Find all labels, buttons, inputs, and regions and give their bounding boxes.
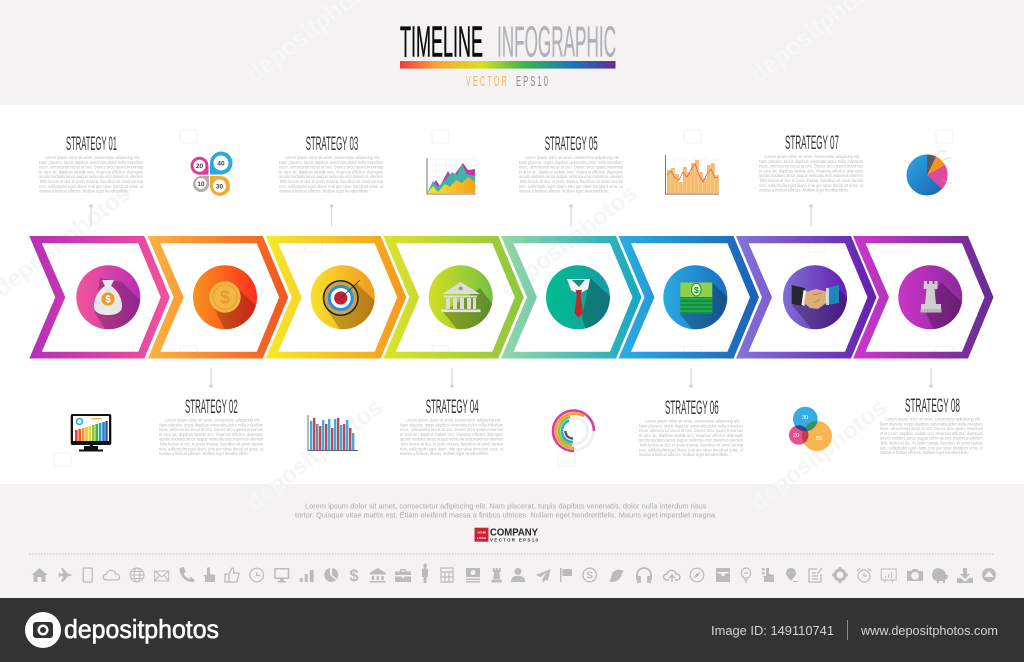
- icon: headphones: [637, 568, 651, 582]
- icon: money stack: $: [694, 285, 699, 295]
- body text: et arcu ac, dapibus sodale orci. Vivamus efficitur, diamquis: [519, 169, 623, 174]
- body text: risus, ultriciesnisi lacus at orci. Donec arcu quam,maximus: [639, 428, 744, 433]
- body text: Nam placera, turpis dapibus venenatis,dolor nulla interdum: [759, 159, 863, 164]
- body text: Lorem ipsum dolor sit amet, consectetur adipiscing elit.: [525, 155, 620, 160]
- body text: massa a finibus ultrices. Nullam eget hendreritfelis.: [639, 452, 729, 457]
- icon: mail: [155, 571, 169, 581]
- body text: Nam placera, turpis dapibus venenatis,dolor nulla interdum: [39, 160, 143, 165]
- icon: bank: [370, 568, 386, 582]
- body text: Lorem ipsum dolor sit amet, consectetur adipiscing elit.: [45, 155, 140, 160]
- body text: Lorem ipsum dolor sit amet, consectetur adipiscing elit.: [645, 418, 740, 424]
- connector: strategy 03: [330, 205, 333, 226]
- strategy 04 block: [400, 397, 504, 456]
- strategy 07 block: STRATEGY 07: [785, 133, 839, 154]
- body text: [159, 418, 264, 456]
- icon: piggy bank: [932, 568, 948, 583]
- chevron timeline: [29, 236, 994, 358]
- body text: risus, ultriciesnisi lacus at orci. Donec arcu quam,maximus: [519, 165, 623, 170]
- body text: felis lectus at dui. In justo massa, faucibus sit amet lacinia: [280, 179, 384, 184]
- body text: [39, 155, 144, 194]
- chart: quad percent petals: 10: [197, 181, 205, 188]
- chevron 6: [618, 236, 759, 358]
- body text: et arcu ac, dapibus sodale orci. Vivamus efficitur, diamquis: [759, 168, 864, 173]
- depositphotos logo mark: [25, 612, 61, 648]
- chart: pie: [904, 151, 952, 196]
- body text: risus, ultriciesnisi lacus at orci. Donec arcu quam,maximus: [759, 164, 864, 169]
- icon: camera: [907, 569, 923, 581]
- body text: iaculis sodales,lacus augue vehicula erat,maximus elemen: [519, 174, 623, 179]
- watermark: [0, 0, 953, 517]
- body text: risus, ultriciesnisi lacus at orci. Donec arcu quam,maximus: [159, 427, 264, 432]
- chart: monitor: [71, 414, 111, 452]
- icon: home: [32, 568, 48, 582]
- strategy 08 block: [880, 396, 983, 455]
- body text: [880, 416, 983, 455]
- icon: thumbs up: [225, 568, 239, 582]
- icon: money bag: [76, 265, 140, 330]
- icon: coin: [583, 568, 596, 582]
- icon: cloud upload: [664, 570, 680, 582]
- body text: non, sollicitudin eget diam. Inte ger vitae tincidunt urna, ut: [39, 184, 144, 189]
- body text: [639, 418, 744, 457]
- image id: Image ID: 149110741: [711, 624, 834, 638]
- body text: felis lectus at dui. In justo massa, faucibus sit amet lacinia: [760, 178, 864, 183]
- connector: strategy 02: [210, 368, 212, 387]
- icon: phone: [180, 567, 195, 582]
- company subtitle: VECTOR EPS10: [490, 538, 538, 542]
- body text: Nam placera, turpis dapibus venenatis,dolor nulla interdum: [400, 422, 503, 427]
- company logo: LOGO: [477, 536, 487, 540]
- body text: iaculis sodales,lacus augue vehicula erat,maximus elemen: [639, 438, 743, 443]
- icon: man: [422, 564, 428, 583]
- title: TIMELINE: [400, 18, 483, 66]
- body text: et arcu ac, dapibus sodale orci. Vivamus efficitur, diamquis: [400, 432, 504, 437]
- body text: iaculis sodales,lacus augue vehicula erat,maximus elemen: [759, 173, 863, 178]
- icon: banknote: [466, 568, 480, 582]
- chart: venn diagram: 50: [816, 436, 822, 442]
- chart: red and blue bars: [308, 415, 358, 450]
- body text: non, sollicitudin eget diam. Inte ger vitae tincidunt urna, ut: [279, 184, 384, 189]
- body text: felis lectus at dui. In justo massa, faucibus sit amet lacinia: [520, 179, 623, 184]
- icon: briefcase: [395, 569, 411, 582]
- body text: iaculis sodales,lacus augue vehicula erat,maximus elemen: [400, 437, 503, 442]
- icon: user: [511, 568, 525, 582]
- body text: massa a finibus ultrices. Nullam eget hendreritfelis.: [880, 450, 969, 455]
- chart: orange bars with line: [666, 155, 719, 194]
- body text: Nam placera, turpis dapibus venenatis,dolor nulla interdum: [159, 422, 263, 427]
- body text: Lorem ipsum dolor sit amet, consectetur adipiscing elit.: [406, 418, 501, 422]
- body text: risus, ultriciesnisi lacus at orci. Donec arcu quam,maximus: [39, 165, 144, 170]
- company name: COMPANY: [490, 528, 538, 538]
- chart: quad percent petals: 40: [217, 160, 225, 167]
- body text: non, sollicitudin eget diam. Inte ger vitae tincidunt urna, ut: [880, 445, 983, 450]
- icon: mobile: [83, 568, 92, 582]
- body text: et arcu ac, dapibus sodale orci. Vivamus efficitur, diamquis: [639, 433, 744, 438]
- strategy 03 block: [279, 134, 384, 194]
- chart: venn diagram: 30: [802, 415, 808, 421]
- body text: massa a finibus ultrices. Nullam eget hendreritfelis.: [279, 189, 369, 194]
- strategy 05 block: STRATEGY 05: [545, 134, 598, 155]
- icon: desktop: [274, 568, 289, 582]
- body text: iaculis sodales,lacus augue vehicula erat,maximus elemen: [159, 437, 263, 442]
- connector: strategy 04: [451, 368, 453, 387]
- chevron 1: [29, 236, 170, 358]
- chevron 8: [853, 236, 994, 358]
- chevron 2: [148, 236, 288, 358]
- subtitle: eps10: EPS10: [516, 73, 550, 90]
- body text: iaculis sodales,lacus augue vehicula erat,maximus elemen: [880, 436, 983, 441]
- body text: [279, 155, 384, 194]
- body text: iaculis sodales,lacus augue vehicula erat,maximus elemen: [279, 174, 383, 179]
- strategy 06 block: STRATEGY 06: [665, 398, 719, 419]
- icon: contact badge: [982, 568, 996, 582]
- body text: Lorem ipsum dolor sit amet, consectetur adipiscing elit.: [285, 155, 380, 160]
- chart: venn diagram: [789, 407, 832, 451]
- body text: felis lectus at dui. In justo massa, faucibus sit amet lacinia: [160, 442, 264, 446]
- icon: bird: [608, 570, 624, 582]
- icon: target: [310, 265, 375, 330]
- chart: quad percent petals: [190, 152, 232, 196]
- body text: et arcu ac, dapibus sodale orci. Vivamus efficitur, diamquis: [279, 169, 384, 174]
- chevron 7: [736, 236, 876, 358]
- body text: non, sollicitudin eget diam. Inte ger vitae tincidunt urna, ut: [519, 184, 623, 189]
- strategy 04 block: STRATEGY 04: [426, 397, 479, 418]
- icon: coin: $: [220, 288, 230, 308]
- company logo: YOUR: [477, 530, 487, 534]
- icon: gear: [832, 567, 848, 583]
- body text: Nam placera, turpis dapibus venenatis,dolor nulla interdum: [519, 160, 623, 165]
- body text: Nam placera, turpis dapibus venenatis,dolor nulla interdum: [880, 421, 983, 426]
- body text: Lorem ipsum dolor sit amet, consectetur adipiscing elit.: [165, 418, 260, 422]
- icon: clock: [250, 568, 264, 582]
- body text: massa a finibus ultrices. Nullam eget hendreritfelis.: [759, 188, 849, 193]
- footer band: [0, 484, 1024, 598]
- icon: bulb: [741, 568, 751, 582]
- body text: [519, 155, 623, 194]
- icon: bars: [300, 570, 314, 582]
- icon: handshake: [783, 265, 847, 330]
- body text: non, sollicitudin eget diam. Inte ger vitae tincidunt urna, ut: [400, 446, 504, 451]
- chart: radial rainbow: [553, 410, 594, 451]
- icon: dollar: $: [349, 566, 359, 585]
- body text: felis lectus at dui. In justo massa, faucibus sit amet lacinia: [40, 179, 144, 184]
- body text: felis lectus at dui. In justo massa, faucibus sit amet lacinia: [881, 440, 983, 446]
- icon: paper plane: [536, 569, 551, 583]
- body text: [400, 418, 504, 456]
- body text: massa a finibus ultrices. Nullam eget hendreritfelis.: [159, 451, 249, 456]
- icon: globe: [130, 568, 144, 582]
- footer text: tortor. Quisque vitae mattis est. Etiam eleifend massa a finibus ultrices. Nullam eget hendreritfelis. Mauris eget imperdiet magna.: [295, 510, 717, 520]
- body text: non, sollicitudin eget diam. Inte ger vitae tincidunt urna, ut: [639, 447, 744, 452]
- title: [400, 18, 616, 90]
- icon: flag: [560, 568, 572, 582]
- strategy 05 block: [519, 134, 623, 194]
- icon: tie: [546, 265, 610, 330]
- connector: strategy 05: [570, 205, 572, 226]
- body text: massa a finibus ultrices. Nullam eget hendreritfelis.: [39, 189, 129, 194]
- connector: strategy 01: [90, 205, 92, 226]
- body text: massa a finibus ultrices. Nullam eget hendreritfelis.: [400, 451, 489, 456]
- chart: quad percent petals: 20: [196, 163, 203, 170]
- icon: chess rook: [898, 265, 962, 330]
- chevron 3: [266, 236, 406, 358]
- body text: risus, ultriciesnisi lacus at orci. Donec arcu quam,maximus: [400, 427, 504, 432]
- watermark: depositphotos: [241, 394, 388, 517]
- body text: et arcu ac, dapibus sodale orci. Vivamus efficitur, diamquis: [880, 431, 983, 436]
- footer text: Lorem ipsum dolor sit amet, consectetur adipiscing elit. Nam placerat, turpis dapibus venenatis, dolor nulla interdum risus: [305, 502, 707, 510]
- chart: quad percent petals: 30: [216, 183, 223, 190]
- icon: money stack: [663, 265, 728, 330]
- icon: cloud: [103, 570, 120, 580]
- strategy 07 block: [759, 133, 864, 193]
- body text: Nam placera, turpis dapibus venenatis,dolor nulla interdum: [639, 423, 743, 428]
- icon: money bag: $: [105, 295, 111, 306]
- body text: non, sollicitudin eget diam. Inte ger vitae tincidunt urna, ut: [159, 446, 264, 451]
- body text: iaculis sodales,lacus augue vehicula erat,maximus elemen: [39, 174, 143, 179]
- icon: inbox: [716, 568, 730, 582]
- icon: pie: [324, 568, 338, 582]
- icon: rook: [492, 568, 502, 582]
- body text: Lorem ipsum dolor sit amet, consectetur adipiscing elit.: [886, 416, 981, 422]
- strategy 01 block: [39, 134, 144, 194]
- footer text: [295, 502, 717, 520]
- body text: Lorem ipsum dolor sit amet, consectetur adipiscing elit.: [765, 154, 860, 159]
- chevron 5: [501, 236, 642, 358]
- dotted divider: [29, 553, 994, 555]
- watermark: depositphotos: [745, 394, 892, 517]
- logo mark: [474, 528, 488, 542]
- text: INFOGRAPHIC: [497, 18, 616, 66]
- site url: www.depositphotos.com: [860, 624, 998, 638]
- divider: [847, 620, 848, 640]
- body text: Nam placera, turpis dapibus venenatis,dolor nulla interdum: [279, 160, 383, 165]
- strategy 02 block: STRATEGY 02: [185, 397, 238, 418]
- icon: download: [957, 568, 973, 583]
- strategy 02 block: [159, 397, 264, 456]
- body text: felis lectus at dui. In justo massa, faucibus sit amet lacinia: [401, 442, 503, 446]
- body text: risus, ultriciesnisi lacus at orci. Donec arcu quam,maximus: [880, 426, 983, 431]
- rainbow bar: [400, 61, 616, 69]
- strategy 03 block: STRATEGY 03: [306, 134, 358, 155]
- icon row: [32, 564, 996, 585]
- icon: touch: [203, 567, 215, 582]
- chart: venn diagram: 20: [793, 433, 799, 439]
- body text: [759, 154, 864, 193]
- chevron 4: [383, 236, 524, 358]
- strategy 06 block: [639, 398, 744, 457]
- bottom brand bar: [0, 598, 1024, 662]
- watermark: depositphotos: [495, 180, 642, 303]
- body text: risus, ultriciesnisi lacus at orci. Donec arcu quam,maximus: [279, 165, 384, 170]
- connector: strategy 06: [690, 368, 692, 387]
- body text: et arcu ac, dapibus sodale orci. Vivamus efficitur, diamquis: [39, 169, 144, 174]
- depositphotos wordmark: depositphotos: [64, 614, 219, 644]
- icon: bank: [428, 265, 493, 330]
- icon: compass: [690, 568, 704, 582]
- icon: plane: [59, 568, 73, 582]
- header band: [0, 0, 1024, 105]
- connector: strategy 08: [930, 368, 932, 387]
- company logo: [474, 528, 538, 542]
- icon: presentation: [881, 569, 896, 582]
- icon: alarm clock: [857, 568, 871, 582]
- strategy 01 block: STRATEGY 01: [66, 134, 117, 155]
- title: VECTOR: [466, 73, 509, 90]
- icon: calculator: [441, 568, 453, 582]
- body text: massa a finibus ultrices. Nullam eget hendreritfelis.: [519, 189, 609, 194]
- icon: pointing hand: [762, 568, 774, 582]
- icon: location pin: [786, 568, 798, 582]
- body text: non, sollicitudin eget diam. Inte ger vitae tincidunt urna, ut: [759, 183, 864, 188]
- body text: felis lectus at dui. In justo massa, faucibus sit amet lacinia: [640, 442, 744, 448]
- icon: coin: S: [586, 570, 593, 582]
- body text: et arcu ac, dapibus sodale orci. Vivamus efficitur, diamquis: [159, 432, 264, 437]
- icon: note: [809, 568, 822, 582]
- chart: area chart: [427, 158, 476, 194]
- connector: strategy 07: [810, 205, 812, 226]
- icon: coin: [193, 265, 257, 330]
